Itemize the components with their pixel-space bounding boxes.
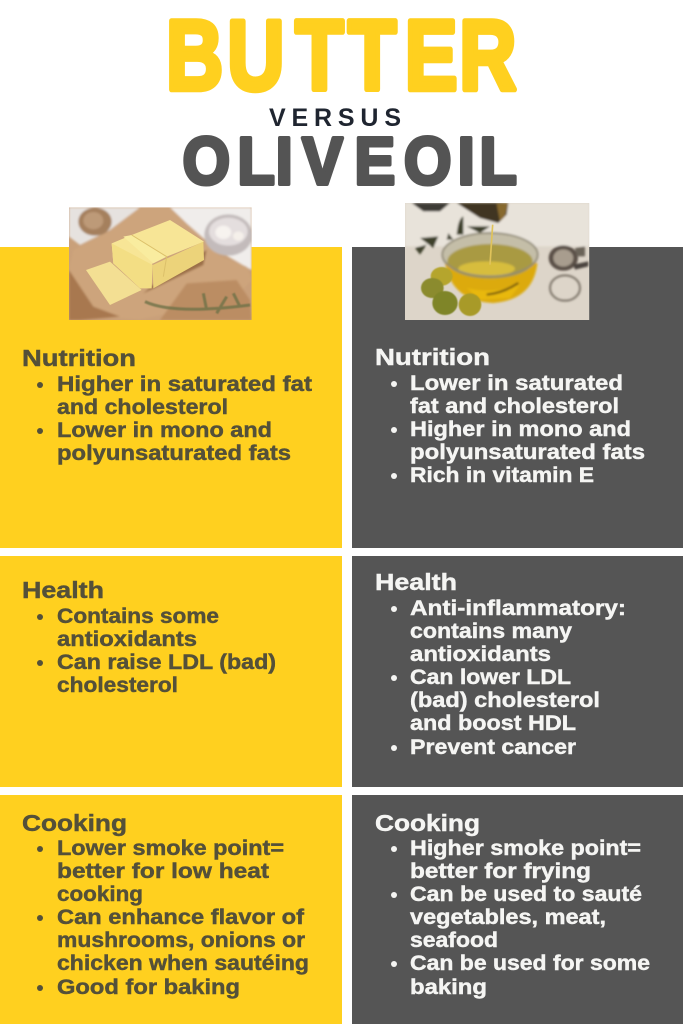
list: olive oil cooking points: Can be used to sauté [410,883,642,906]
list: olive oil cooking points [391,837,650,999]
list: olive oil cooking points: baking [410,976,487,999]
list: butter cooking points: Can enhance flavor of [57,906,305,929]
list: butter health points: cholesterol [57,674,178,697]
list: butter cooking points: mushrooms, onions or [57,929,305,952]
list: butter health points [37,605,276,697]
list: olive oil health points: Prevent cancer [410,736,576,759]
list: olive oil health points: and boost HDL [410,712,576,735]
list: butter nutrition points: Higher in saturated fat [57,373,312,396]
heading: butter health: Health [22,577,104,603]
list: olive oil cooking points: seafood [410,929,498,952]
heading: butter nutrition: Nutrition [22,345,136,371]
list: butter nutrition points: Lower in mono and [57,419,272,442]
panel: butter cooking [0,795,342,1024]
heading: butter cooking: Cooking [22,810,127,836]
heading: olive oil nutrition: Nutrition [375,344,490,370]
panel: olive oil health [352,556,683,787]
list: butter cooking points: Lower smoke point= [57,837,284,860]
list: butter cooking points: cooking [57,883,143,906]
list: butter cooking points: chicken when sautéing [57,952,309,975]
panel: olive oil nutrition [352,247,683,548]
list: olive oil health points [391,597,626,759]
list: olive oil health points: Can lower LDL [410,666,571,689]
list: olive oil nutrition points: Rich in vitamin E [410,464,594,487]
panel: olive oil cooking [352,795,683,1024]
photo: butter on parchment [69,207,252,320]
list: butter health points: Contains some [57,605,219,628]
list: olive oil cooking points: vegetables, meat, [410,906,606,929]
olives [421,267,481,316]
list: butter health points: Can raise LDL (bad) [57,651,276,674]
title: butter: BUTTER [166,0,516,110]
list: olive oil nutrition points: polyunsaturated fats [410,441,645,464]
panel: butter nutrition [0,247,342,548]
list: butter health points: antioxidants [57,628,197,651]
list: butter nutrition points: polyunsaturated fats [57,442,291,465]
title: olive oil: OLIVE OIL [183,123,517,199]
list: olive oil cooking points: better for frying [410,860,591,883]
list: olive oil nutrition points [391,372,645,487]
list: olive oil nutrition points: Lower in saturated [410,372,623,395]
list: olive oil health points: Anti-inflammatory: [410,597,626,620]
list: olive oil health points: antioxidants [410,643,551,666]
list: olive oil cooking points: Can be used for some [410,952,650,975]
list: olive oil cooking points: Higher smoke point= [410,837,641,860]
list: olive oil nutrition points: Higher in mono and [410,418,631,441]
list: butter cooking points: better for low heat [57,860,269,883]
heading: olive oil health: Health [375,569,457,595]
list: butter cooking points [37,837,309,999]
list: butter nutrition points: and cholesterol [57,396,228,419]
photo: olive oil bowl [405,203,589,320]
heading: olive oil cooking: Cooking [375,810,480,836]
list: olive oil nutrition points: fat and cholesterol [410,395,619,418]
list: butter nutrition points [37,373,312,465]
list: butter cooking points: Good for baking [57,976,240,999]
list: olive oil health points: (bad) cholesterol [410,689,600,712]
subtitle: versus: VERSUS [269,104,401,132]
butter block [86,220,204,305]
list: olive oil health points: contains many [410,620,572,643]
rosemary [145,293,250,313]
panel: butter health [0,556,342,787]
oil stream [490,225,493,265]
